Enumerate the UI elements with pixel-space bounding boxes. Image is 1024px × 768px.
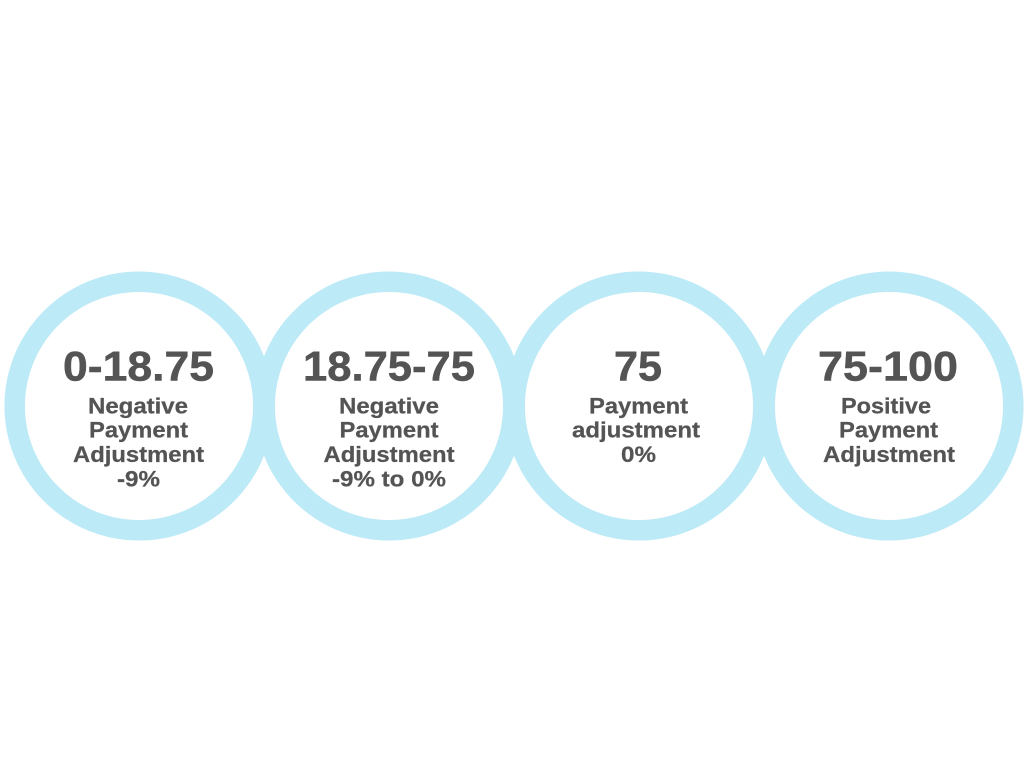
ring 1 (15, 282, 263, 530)
label: negative payment adjustment -9% to 0%: -9% to 0% (332, 466, 446, 492)
label: negative payment adjustment -9% to 0%: Payment (340, 418, 439, 442)
label: positive payment adjustment: Adjustment (823, 442, 956, 467)
label: negative payment adjustment -9% to 0%: Negative (339, 394, 439, 418)
label: payment adjustment 0% (572, 394, 701, 467)
label: negative payment adjustment -9%: Adjustment (73, 442, 205, 467)
number: 75: 75 (614, 342, 662, 390)
ring 4 (765, 282, 1013, 530)
number: 75-100: 75-100 (818, 342, 958, 390)
label: positive payment adjustment (823, 394, 956, 467)
label: positive payment adjustment: Positive (841, 394, 931, 418)
label: negative payment adjustment -9%: -9% (117, 466, 160, 492)
panel: score 75 (515, 282, 763, 530)
number: 18.75-75: 18.75-75 (303, 342, 475, 390)
panel: score range 18.75-75 (265, 282, 513, 530)
label: payment adjustment 0%: 0% (621, 442, 656, 467)
ring 2 (265, 282, 513, 530)
panel: score range 75-100 (765, 282, 1013, 530)
label: payment adjustment 0%: adjustment (572, 418, 701, 442)
label: positive payment adjustment: Payment (839, 418, 939, 442)
panel: score range 0-18.75 (15, 282, 263, 530)
label: negative payment adjustment -9% to 0%: Adjustment (324, 442, 455, 467)
ring 3 (515, 282, 763, 530)
label: negative payment adjustment -9% to 0% (324, 394, 455, 492)
label: negative payment adjustment -9% (73, 394, 205, 492)
label: negative payment adjustment -9%: Payment (89, 418, 189, 442)
label: payment adjustment 0%: Payment (589, 394, 689, 418)
label: negative payment adjustment -9%: Negative (88, 394, 188, 418)
number: 0-18.75: 0-18.75 (63, 342, 214, 390)
